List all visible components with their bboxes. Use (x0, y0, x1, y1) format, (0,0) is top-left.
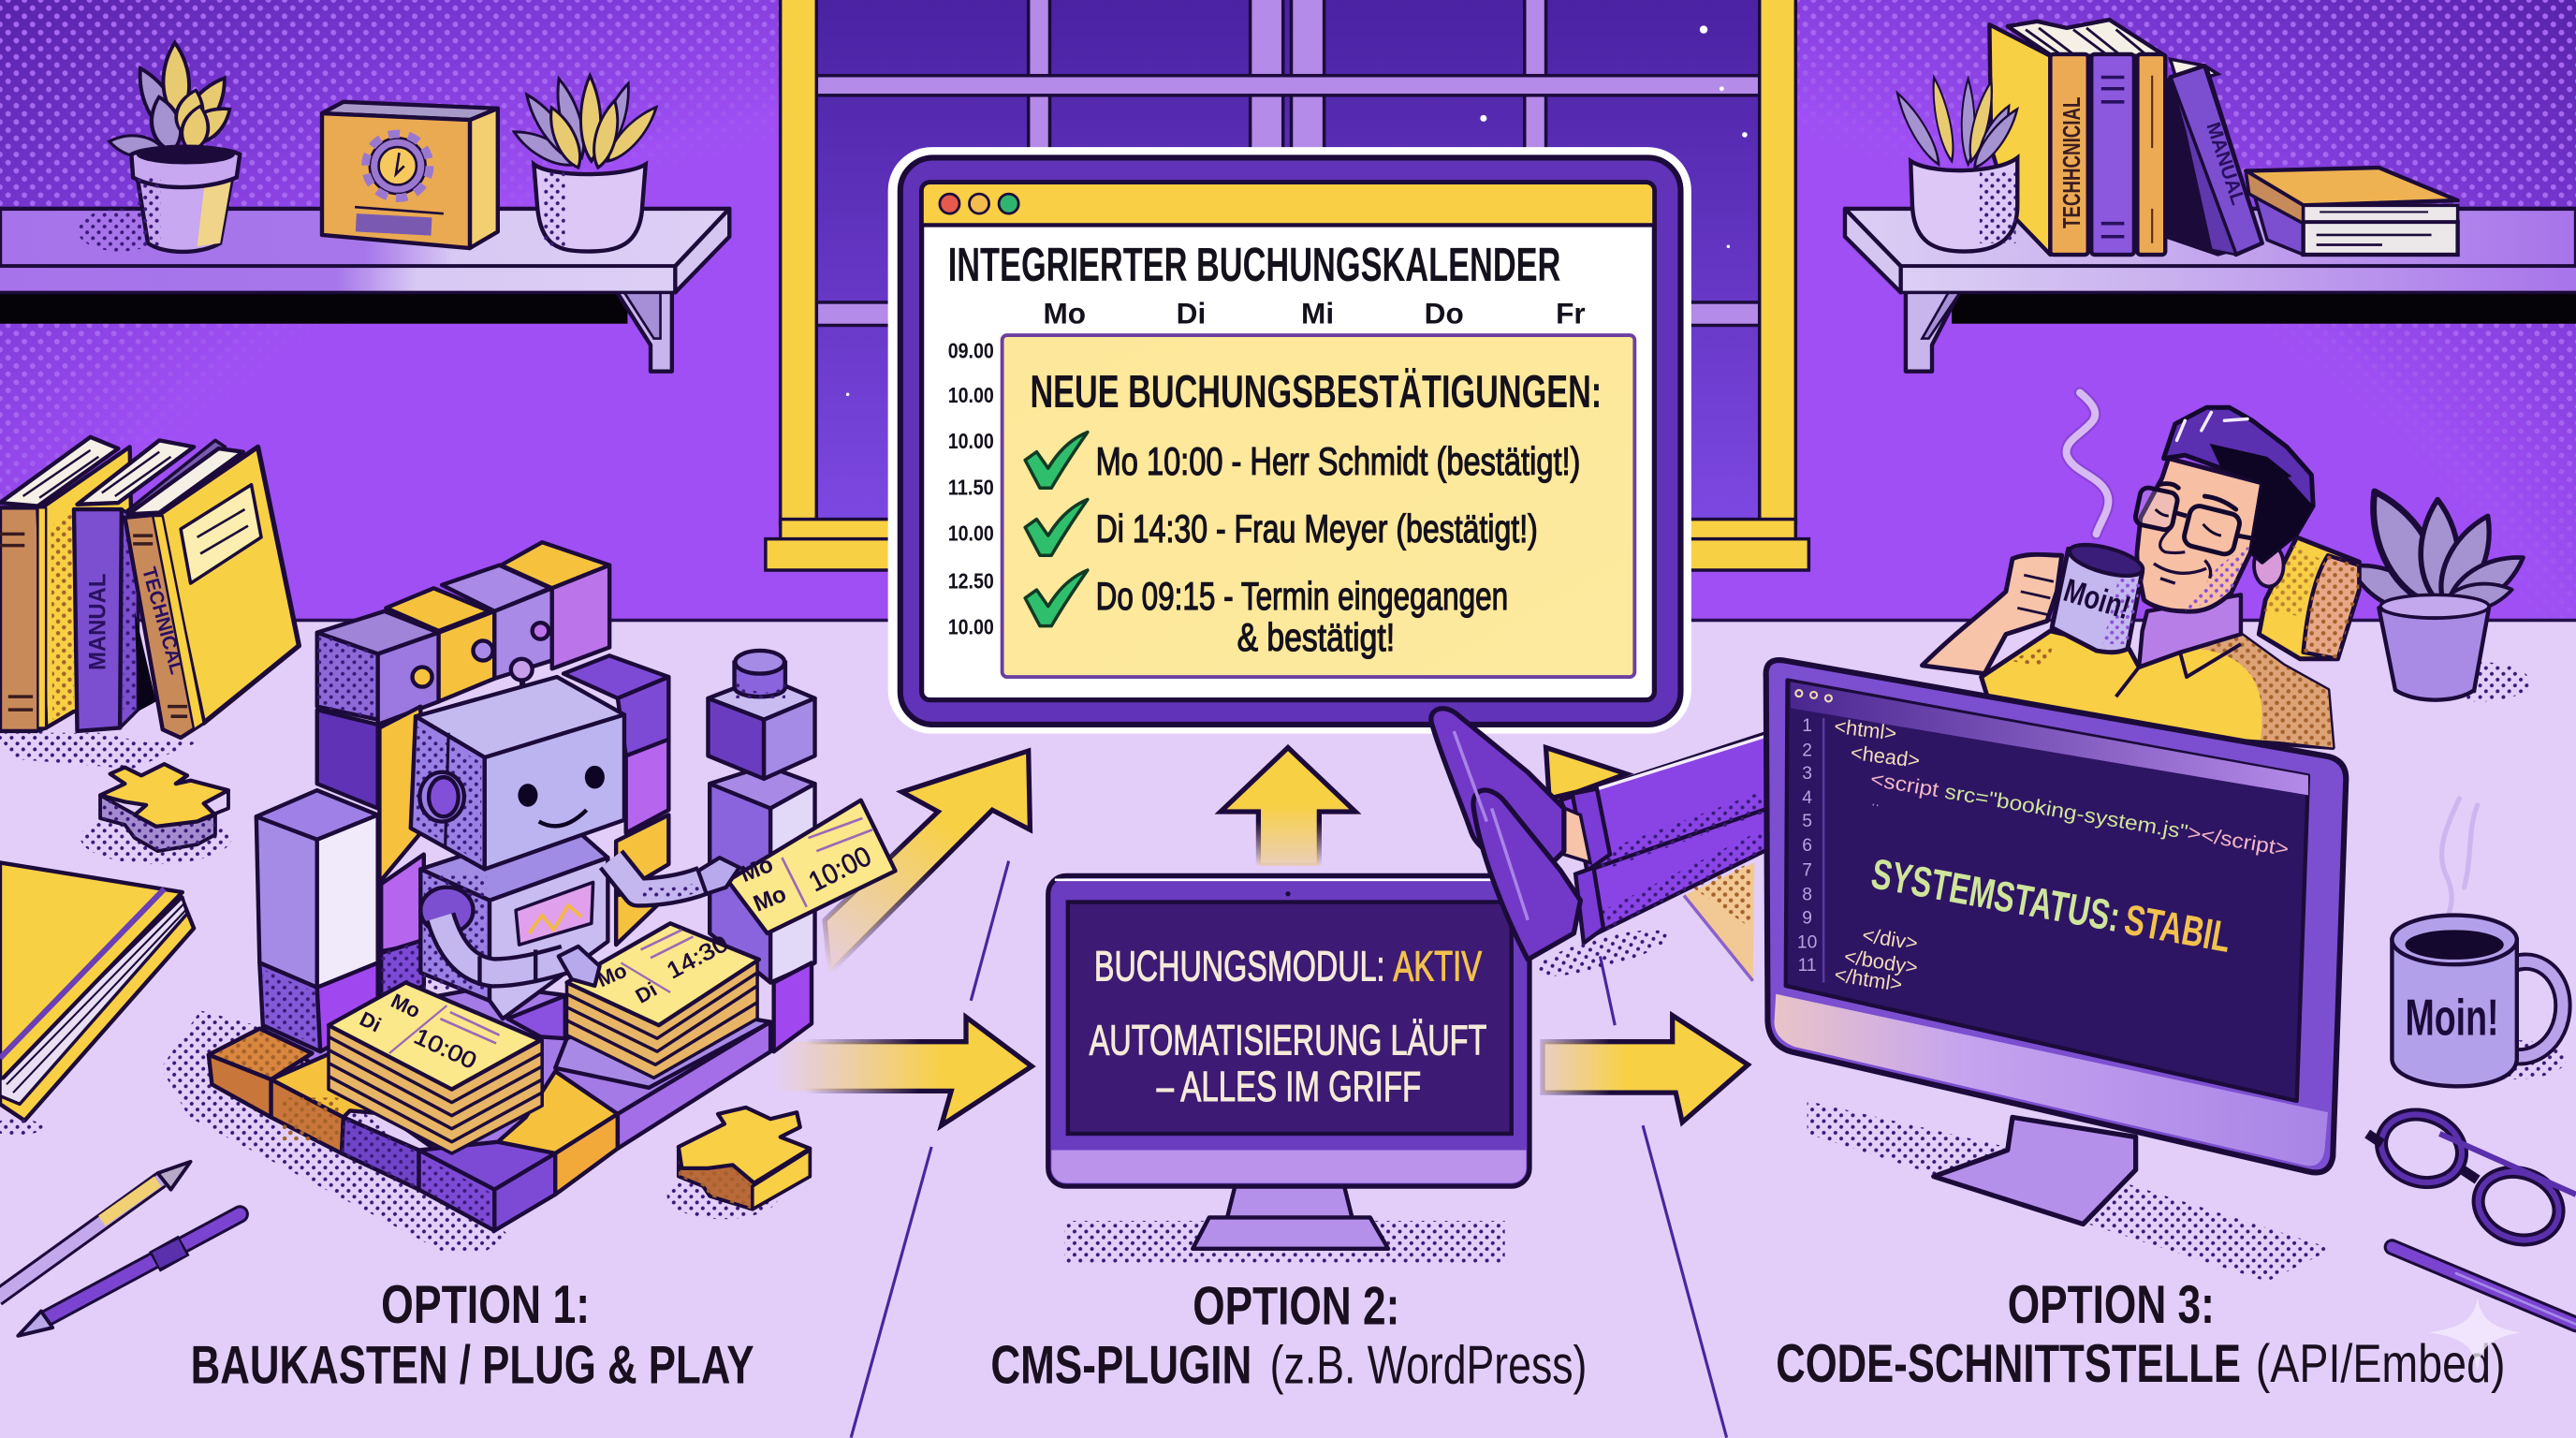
robot workstation (161, 542, 896, 1252)
label: option 3 (1776, 1275, 2506, 1394)
code snippet (1833, 714, 2291, 996)
shoes (1431, 709, 1564, 871)
booking line 3: & bestätigt! (1237, 615, 1395, 659)
coffee mug on desk: Moin! (2405, 990, 2499, 1047)
stand shadow (1808, 1101, 2333, 1282)
label: option 2: (z.B. WordPress) (1270, 1336, 1587, 1396)
manual book: MANUAL (85, 574, 110, 670)
window dots (1795, 690, 1832, 701)
held booking card: Mo (737, 852, 777, 888)
calendar browser monitor (889, 148, 1690, 733)
pens left (0, 1162, 240, 1336)
label: option 1: OPTION 1: (381, 1275, 590, 1335)
neck (2139, 594, 2241, 668)
status line: BUCHUNGSMODUL: (1094, 943, 1385, 990)
robot head (411, 659, 624, 869)
time column: 09.00 (948, 339, 994, 363)
card stack one: Di (356, 1006, 385, 1036)
arrow: api to calendar (1546, 748, 1754, 981)
label: option 2: CMS-PLUGIN (990, 1336, 1251, 1396)
stand (1934, 1117, 2136, 1224)
puzzle piece left (80, 764, 231, 864)
booking confirmations panel (1003, 335, 1634, 677)
code snippet: </html> (1833, 962, 1904, 996)
code snippet: <script src="booking-system.js" ></script> (1868, 767, 2291, 860)
time column: 10.00 (948, 614, 994, 638)
time column: 10.00 (948, 429, 994, 453)
robot hand on cards (559, 946, 600, 986)
puzzle piece right (667, 1108, 810, 1219)
pen right (2392, 1247, 2576, 1325)
glasses on face (2134, 486, 2256, 556)
book one (0, 437, 135, 731)
left shelf (0, 209, 729, 372)
arm and hand (1922, 554, 2062, 674)
system status: SYSTEMSTATUS: (1868, 849, 2124, 941)
icon: check 3 (1025, 570, 1088, 626)
code snippet: </body> (1842, 945, 1920, 979)
steam (2067, 392, 2108, 534)
label: option 3: CODE-SCHNITTSTELLE (1776, 1334, 2241, 1394)
weekday header (1044, 297, 1586, 330)
base platform (209, 986, 770, 1231)
line numbers: 4 (1802, 788, 1812, 808)
tall block (256, 790, 378, 1051)
plant in white pot on shelf (509, 76, 663, 252)
head (2134, 407, 2313, 611)
right shelf (1845, 209, 2576, 372)
held booking card: Mo (750, 881, 790, 917)
developer monitor (1766, 660, 2346, 1282)
upright books on right shelf (1989, 20, 2165, 255)
code snippet: <head> (1850, 741, 1922, 772)
automation message (1090, 1017, 1486, 1110)
chair headrest (2259, 537, 2359, 659)
technical book: TECHNICAL (138, 565, 188, 677)
technical book (124, 447, 299, 738)
perspective lines on floor (851, 861, 1727, 1438)
card stack two: Di (631, 977, 661, 1008)
monitor shadow (1064, 1221, 1505, 1264)
held booking card (698, 800, 896, 933)
books left on floor (0, 437, 299, 769)
robot shoulder and arm on cards (420, 888, 565, 986)
line numbers: 11 (1798, 956, 1817, 976)
label: option 1: BAUKASTEN / PLUG & PLAY (191, 1336, 754, 1396)
system status: STABIL (2121, 896, 2234, 961)
booking line 3: Do 09:15 - Termin eingegangen (1096, 574, 1508, 618)
smile (2154, 560, 2211, 583)
booking line 3 (1096, 574, 1508, 659)
weekday header: Do (1425, 297, 1464, 330)
weekday header: Mo (1044, 297, 1086, 330)
line numbers: 6 (1802, 836, 1812, 856)
line numbers: 9 (1802, 908, 1812, 928)
card stack one: 10:00 (410, 1024, 480, 1075)
code snippet: .. (1870, 793, 1881, 810)
floor (0, 619, 2576, 1438)
line numbers (1797, 716, 1817, 976)
label: option 2: OPTION 2: (1193, 1277, 1399, 1337)
leaning manual and stacked books on right shelf (2165, 59, 2458, 257)
time column: 11.50 (948, 475, 994, 499)
automation message: AUTOMATISIERUNG LÄUFT (1090, 1017, 1486, 1064)
booking line 2: Di 14:30 - Frau Meyer (bestätigt!) (1096, 506, 1538, 550)
card stack two: Mo (593, 959, 630, 991)
label: option 3: (API/Embed) (2256, 1334, 2506, 1394)
time column: 10.00 (948, 521, 994, 545)
plant in white pot beside books (1892, 76, 2024, 252)
coffee mug held (2052, 538, 2145, 653)
automation message: – ALLES IM GRIFF (1157, 1063, 1421, 1110)
time column: 12.50 (948, 568, 994, 593)
label: option 1 (191, 1275, 754, 1396)
card stack one: Mo (388, 989, 424, 1022)
held booking card: 10:00 (804, 841, 876, 898)
line numbers: 3 (1802, 764, 1812, 784)
label: option 3: OPTION 3: (2008, 1275, 2215, 1335)
glasses on desk (2367, 1104, 2576, 1251)
arrow: plug and play to cms (772, 1017, 1032, 1125)
coffee mug held: Moin! (2059, 572, 2135, 626)
legs on desk (1431, 709, 1778, 985)
calendar title: INTEGRIERTER BUCHUNGSKALENDER (948, 238, 1560, 291)
developer chair, plant and person (1922, 392, 2531, 748)
manual book (74, 440, 225, 731)
weekday header: Di (1177, 297, 1206, 330)
time column: 10.00 (948, 383, 994, 407)
line numbers: 2 (1802, 741, 1812, 760)
plant left on shelf (108, 42, 240, 252)
back puzzle wall (317, 542, 668, 1003)
weekday header: Fr (1556, 297, 1586, 330)
book box with gear and clock (322, 102, 498, 248)
arrow: cms to calendar (1221, 748, 1355, 866)
line numbers: 10 (1797, 933, 1817, 953)
plant right on floor (2342, 481, 2531, 701)
status line: AKTIV (1393, 943, 1483, 990)
wall background (0, 0, 2576, 623)
weekday header: Mi (1301, 297, 1334, 330)
card stack one (329, 983, 542, 1153)
line numbers: 1 (1802, 716, 1812, 736)
card stack two: 14:30 (663, 931, 733, 984)
line numbers: 8 (1802, 886, 1812, 905)
leaning manual and stacked books on right shelf: MANUAL (2202, 120, 2248, 208)
shirt (1982, 631, 2333, 748)
icon: check 2 (1025, 500, 1088, 555)
booking line 1: Mo 10:00 - Herr Schmidt (bestätigt!) (1096, 439, 1580, 483)
right column (708, 651, 815, 1051)
card stack two (567, 923, 759, 1078)
robot body (420, 822, 607, 1019)
booking confirmations panel: NEUE BUCHUNGSBESTÄTIGUNGEN: (1030, 367, 1602, 418)
cms monitor (1048, 875, 1530, 1264)
browser title bar (922, 183, 1654, 225)
robot arm holding card (611, 859, 703, 893)
hair (2163, 407, 2313, 562)
icon: check 1 (1025, 433, 1088, 488)
code snippet: <html> (1833, 714, 1898, 745)
line numbers: 5 (1802, 812, 1812, 831)
watermark sparkle (2428, 1298, 2520, 1371)
upright books on right shelf: TECHHCNICIAL (2057, 97, 2086, 228)
steam (2442, 799, 2478, 917)
line numbers: 7 (1802, 860, 1812, 880)
window (766, 0, 1808, 570)
notebook left (0, 862, 194, 1136)
arrow: plug and play to calendar (825, 751, 1030, 973)
label: option 2 (990, 1277, 1587, 1396)
coffee mug on desk (2392, 799, 2566, 1086)
building block shadow (161, 1010, 509, 1252)
arrow: cms to api (1543, 1016, 1748, 1123)
code snippet: </div> (1861, 923, 1920, 955)
time column (948, 339, 994, 638)
